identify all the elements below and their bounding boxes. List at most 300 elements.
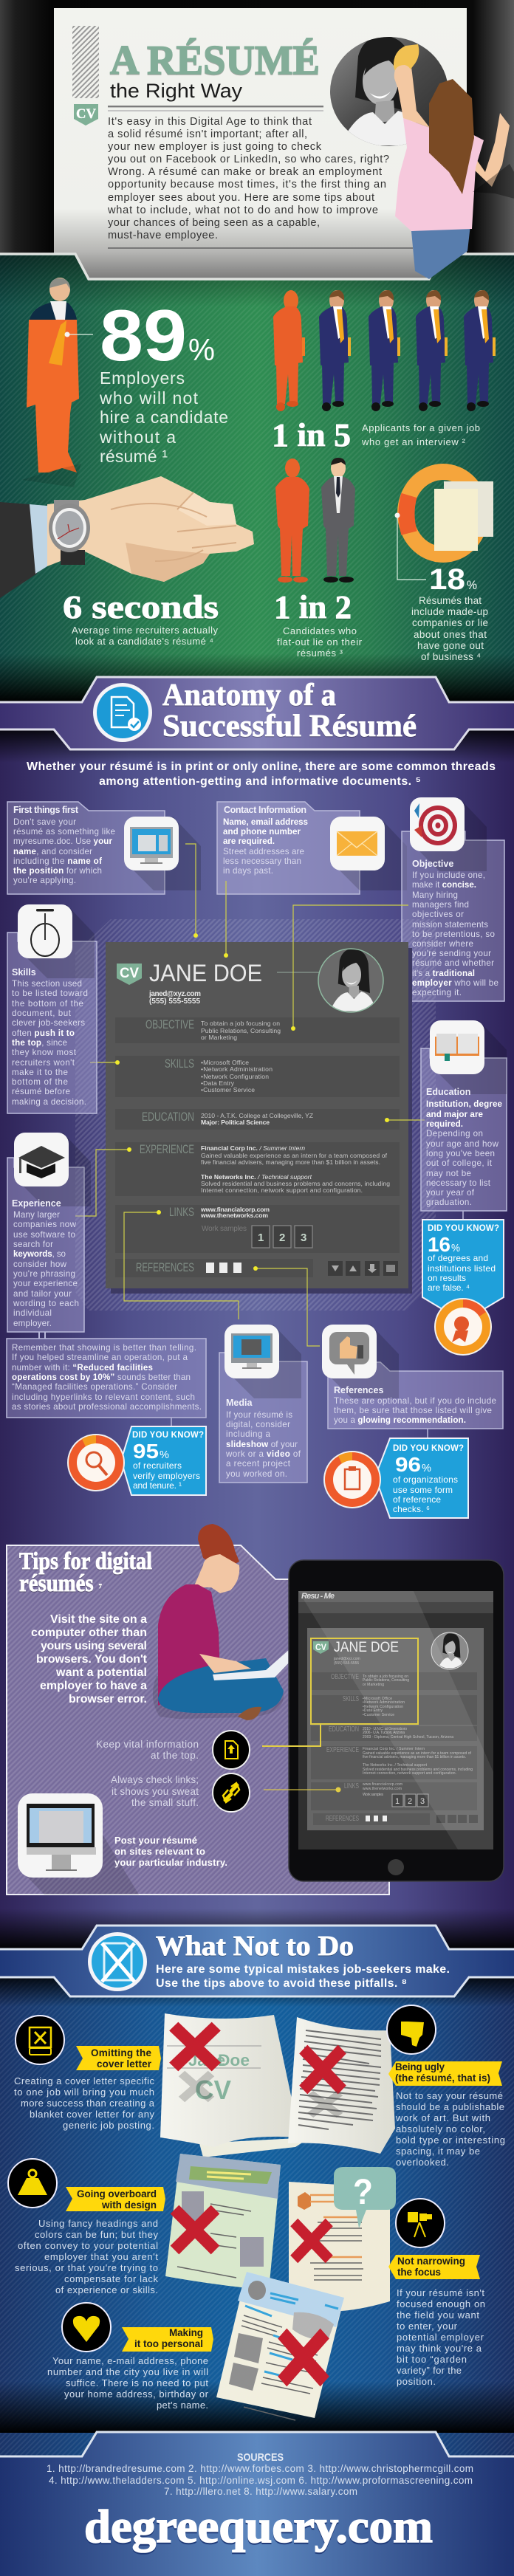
mini resume: EXPERIENCE <box>326 1746 359 1754</box>
heading: Anatomy of a <box>162 679 336 712</box>
panel: education <box>421 1020 507 1211</box>
heading: Media <box>226 1398 253 1408</box>
text block: you a glowing recommendation. <box>334 1415 466 1425</box>
paper: unfocused <box>289 2182 390 2311</box>
text block: number and the city you live in will <box>47 2366 208 2377</box>
text block: you're applying. <box>13 876 76 885</box>
text block: graduation. <box>426 1198 472 1207</box>
text block: Using fancy headings and <box>38 2218 158 2229</box>
text block <box>12 1343 202 1412</box>
text block: individual <box>13 1308 52 1318</box>
intro text: common threads: among attention-getting and informative documents. ⁵ <box>99 775 421 788</box>
icon: graduation cap card <box>14 1133 91 1206</box>
caption: include made-up <box>411 606 488 617</box>
text block: mission statements <box>412 920 488 930</box>
row: links: www.financialcorp.com <box>200 1206 270 1213</box>
ribbon label <box>122 2327 213 2352</box>
illustration: hand with wristwatch <box>0 476 254 598</box>
caption: have gone out <box>417 640 484 651</box>
heading: Contact Information <box>224 805 306 815</box>
text block: post on relevant sites: your particular industry. <box>114 1857 227 1868</box>
mini resume: OBJECTIVE <box>331 1673 359 1681</box>
number: 18%: 18 <box>429 563 465 596</box>
heading: Successful Résumé <box>162 710 417 743</box>
row: education: EDUCATION <box>142 1110 194 1124</box>
illustration: man in half-orange suit <box>22 278 81 487</box>
text block: operations cost by 10%” sounds better than <box>12 1373 191 1382</box>
callout: did you know 96 percent <box>323 1429 468 1518</box>
callout: did you know 16 percent <box>422 1211 504 1356</box>
row: links: 3 <box>301 1232 306 1244</box>
panel: first things first <box>7 802 201 894</box>
text block: Street addresses are <box>223 847 304 856</box>
stat: 1 in 2 candidates <box>274 458 363 659</box>
caption: who get an interview ² <box>361 436 466 447</box>
tablet home button <box>388 1859 404 1875</box>
intro text block: you out on Facebook or LinkedIn, so who cares, right? <box>108 154 389 165</box>
text block: serious, or that you're trying to <box>15 2262 158 2273</box>
caption: who will not <box>99 388 199 408</box>
buttons: resume controls <box>328 1261 398 1276</box>
ribbon label: Not narrowing <box>397 2256 465 2267</box>
row: education <box>115 1109 400 1130</box>
text block: test in browsers: employer to have a <box>40 1680 147 1692</box>
text block: the bottom of the <box>12 999 83 1009</box>
row: objective <box>115 1017 400 1043</box>
ribbon label: Being ugly <box>395 2061 445 2072</box>
text block: a recent project <box>226 1459 291 1469</box>
text block <box>412 870 498 997</box>
icon: chain link <box>213 1773 250 1812</box>
mini resume: or Marketing <box>363 1683 384 1687</box>
row: experience: Financial Corp Inc. / Summer Intern <box>201 1144 305 1152</box>
stat: 6 seconds <box>0 476 254 647</box>
row: objective: OBJECTIVE <box>145 1017 194 1031</box>
panel: sample resume <box>106 942 412 1294</box>
name: JANE DOE <box>149 960 262 986</box>
banner: what not to do <box>0 1925 514 1996</box>
intro text: common threads <box>27 760 496 788</box>
text block: make it concise. <box>412 880 476 890</box>
footer panel <box>0 2431 514 2576</box>
mini resume: •Customer Service <box>363 1713 394 1717</box>
text block: make it to the <box>12 1068 68 1077</box>
intro text block: what to include, what not to do and how to improve <box>107 205 378 216</box>
callout: did you know 16 percent: institutions listed <box>428 1263 496 1274</box>
text block: résumé and whether <box>412 958 494 968</box>
text block: absolutely no color, <box>396 2123 485 2134</box>
banner: anatomy of a successful resume <box>0 676 514 749</box>
row: experience <box>115 1142 400 1196</box>
mini resume: Work samples <box>363 1793 384 1797</box>
row: education: Major: Political Science <box>201 1119 270 1126</box>
mini resume: 3 <box>420 1797 425 1806</box>
text block: to be listed toward <box>12 989 88 998</box>
text block: them, be sure that those listed will give <box>334 1406 492 1415</box>
caption <box>99 368 228 466</box>
row: links: Work samples <box>202 1225 247 1233</box>
text block: overlooked. <box>396 2157 449 2168</box>
illustration: woman with laptop <box>153 1524 310 1720</box>
mistake: making it too personal <box>47 2303 213 2411</box>
ribbon label: it too personal <box>134 2338 203 2349</box>
callout: did you know 96 percent: of organizations <box>393 1474 458 1485</box>
decoration: striped tab <box>72 26 99 98</box>
intro text block: It's easy in this Digital Age to think that <box>108 116 312 128</box>
icon: desktop card <box>18 1793 139 1895</box>
mini resume: •Microsoft Office <box>363 1697 392 1701</box>
mini resume: SKILLS <box>343 1695 359 1703</box>
text block: of experience or skills. <box>55 2284 158 2295</box>
row: experience: EXPERIENCE <box>140 1142 194 1156</box>
text block: If you include one, <box>412 870 485 880</box>
panel: skills <box>7 904 97 1113</box>
illustration: woman wiping the mirror <box>394 44 514 279</box>
number: 18%: % <box>467 578 477 592</box>
text block <box>334 1396 496 1425</box>
tip: check links <box>111 1774 199 1808</box>
ribbon label <box>388 2255 480 2279</box>
connectors: yellow callout lines <box>75 844 425 1346</box>
text block: spacing, it may be <box>396 2146 480 2157</box>
tip: keep vital information: Keep vital information <box>96 1739 199 1750</box>
text block: This section used <box>12 979 82 989</box>
title: A RÉSUMÉ <box>110 38 320 83</box>
sources heading: SOURCES <box>237 2451 284 2464</box>
text block <box>223 817 308 876</box>
text block <box>47 2355 209 2411</box>
illustration: orange applicant <box>273 290 305 411</box>
illustration: stack of resume documents <box>160 2013 396 2420</box>
caption: Average time recruiters actually <box>72 625 219 636</box>
heading: Objective <box>412 859 453 869</box>
text block: use software to <box>13 1230 75 1240</box>
text block: position. <box>397 2376 436 2387</box>
ribbon label: the focus <box>397 2267 441 2278</box>
heading: Tips for digital <box>19 1548 152 1575</box>
text block: pet's name. <box>157 2400 208 2411</box>
row: skills: SKILLS <box>165 1057 194 1071</box>
panel: contact information <box>217 802 407 894</box>
mini resume: LINKS <box>344 1782 359 1790</box>
icon: weight <box>8 2159 57 2208</box>
text block: it's a traditional <box>412 969 475 978</box>
panel: references <box>322 1325 503 1429</box>
mini resume: 2010 - U.N.C. at Greensboro <box>363 1727 407 1731</box>
text block: test in browsers: browsers. You don't <box>36 1653 148 1666</box>
intro text block: your chances of being seen as a capable, <box>108 217 320 229</box>
row: objective: or Marketing <box>201 1034 237 1041</box>
text block <box>397 2287 485 2387</box>
text block: may think you're a <box>397 2343 482 2354</box>
background: green stats section <box>0 255 514 702</box>
text block: test in browsers <box>31 1613 148 1706</box>
callout: did you know 96 percent: DID YOU KNOW? <box>393 1444 464 1453</box>
text block: wording to each <box>13 1299 79 1308</box>
text block: required. <box>426 1119 463 1129</box>
text block: work of art. But with <box>395 2112 490 2123</box>
text block: expecting it. <box>412 988 462 997</box>
caption: without a <box>99 427 176 447</box>
text block: test in browsers: want a potential <box>55 1666 147 1679</box>
mini resume: janed@xyz.com <box>333 1657 360 1661</box>
paper: missing cover letter: Doe <box>218 2051 250 2070</box>
mini resume: Gained valuable experience as an intern for a team composed of <box>363 1751 472 1756</box>
text block: test in browsers: computer other than <box>31 1627 147 1639</box>
heading: résumés ⁷ <box>19 1570 102 1597</box>
row: objective: Public Relations, Consulting <box>201 1027 281 1034</box>
row: experience: Internet connection, network support and configuration. <box>201 1186 363 1194</box>
speech bubble with question mark: ? <box>353 2173 373 2212</box>
tip: check links: Always check links; <box>111 1774 199 1785</box>
row: experience: five financial advisers, managing more than $1 billion in assets. <box>201 1158 380 1166</box>
text block: to enter, your <box>397 2321 458 2332</box>
row: links: 2 <box>279 1232 285 1244</box>
caption: hire a candidate <box>100 408 228 427</box>
ribbon label <box>388 2061 502 2086</box>
row: links: www.thenetworks.com <box>200 1212 268 1219</box>
row: objective: To obtain a job focusing on <box>201 1020 280 1027</box>
number: 1 in 5: 1 in 5 <box>272 417 351 453</box>
text block: often convey to your potential <box>18 2240 158 2251</box>
icon: file upload <box>213 1731 250 1769</box>
row: skills: •Customer Service <box>201 1086 255 1093</box>
callout: did you know 16 percent: of degrees and <box>428 1253 488 1263</box>
callout: did you know 96 percent: 96 <box>395 1453 421 1476</box>
text block: the top, since <box>12 1038 67 1048</box>
intro text: common threads: Whether your résumé is in print or only online, there are some common threads <box>27 760 496 773</box>
contact details: (555) 555-5555 <box>149 997 200 1006</box>
text block: your experience <box>13 1279 78 1288</box>
caption: companies or lie <box>412 617 488 628</box>
icon: document with check <box>93 683 152 742</box>
caption <box>277 625 363 659</box>
icon: crossed document <box>88 1932 147 1991</box>
heading: Education <box>426 1087 470 1097</box>
text block: “Managed facilities operations.” Consider <box>12 1382 177 1392</box>
text block: out of college, it <box>426 1158 493 1168</box>
mini resume: EDUCATION <box>329 1725 359 1734</box>
heading <box>162 679 417 743</box>
text block: to be pretentious, so <box>412 930 495 939</box>
text block: Many hiring <box>412 890 458 900</box>
mini resume: 2003 - Diploma, Central High School, Tucson, Arizona <box>363 1735 453 1739</box>
subheading: Use the tips above to avoid these pitfalls. ⁸ <box>156 1977 407 1990</box>
caption: Candidates who <box>283 625 357 636</box>
text block: Creating a cover letter specific <box>14 2075 155 2086</box>
mini resume: www.thenetworks.com <box>363 1787 402 1791</box>
text block <box>13 1210 79 1328</box>
icon: magnifier badge <box>67 1434 125 1491</box>
text block: companies now <box>13 1220 77 1229</box>
text block: including a <box>226 1429 271 1439</box>
text block: and major are <box>426 1110 484 1119</box>
callout: did you know 16 percent: on results <box>428 1273 466 1283</box>
text block: you're phrasing <box>13 1269 75 1279</box>
subtitle: the Right Way <box>110 80 243 102</box>
row: skills: •Microsoft Office <box>201 1059 249 1066</box>
callout: did you know 95 percent: 95 <box>133 1440 159 1463</box>
callout: did you know 95 percent: % <box>160 1449 169 1461</box>
panel: media <box>219 1325 307 1483</box>
intro text block: a solid résumé isn't important; after all, <box>108 128 307 140</box>
text block: test in browsers: Visit the site on a <box>50 1613 147 1626</box>
site name: Resu - Me <box>301 1592 335 1601</box>
text block: colors can be fun; but they <box>35 2229 158 2240</box>
text block: consider where <box>412 939 473 949</box>
paper: missing cover letter <box>160 2013 310 2157</box>
illustration: tablet with resume <box>262 1560 504 1881</box>
text block: suffice. There is no need to put <box>66 2377 208 2388</box>
number: 6 seconds: 6 seconds <box>63 589 219 625</box>
callout: did you know 16 percent: % <box>451 1242 460 1254</box>
background: dark top section <box>0 0 514 255</box>
row: skills: •Network Configuration <box>201 1073 269 1080</box>
text block: test in browsers: browser error. <box>69 1693 147 1706</box>
text block: myresume.doc. Use your <box>13 837 112 846</box>
text block: clever job-seekers <box>12 1018 85 1028</box>
icon: unicycle card <box>18 904 95 978</box>
mistake: not narrowing the focus <box>388 2199 485 2387</box>
text block: are required. <box>223 837 275 846</box>
heading: Experience <box>12 1198 61 1209</box>
heading: What Not to Do <box>156 1931 354 1962</box>
callout: did you know 96 percent: use some form <box>393 1485 453 1495</box>
mistake: going overboard with design <box>8 2159 165 2295</box>
icon: ribbon badge <box>434 1298 492 1356</box>
caption: résumés ³ <box>297 648 343 659</box>
caption: Employers <box>100 368 185 388</box>
icon: video monitor card <box>225 1325 301 1398</box>
callout: did you know 95 percent: of recruiters <box>133 1460 182 1471</box>
mini resume <box>307 1628 484 1830</box>
intro text block: Wrong. A résumé can make or break an employment <box>108 166 382 178</box>
sources list: 1. http://brandredresume.com 2. http://www.forbes.com 3. http://www.christophermcgill.com <box>47 2463 473 2474</box>
text block: may not be <box>426 1169 471 1178</box>
sources list <box>47 2463 473 2497</box>
text block: blanket cover letter for any <box>30 2109 155 2120</box>
mini resume: 1 <box>395 1797 400 1806</box>
mini resume: •Data Entry <box>363 1708 383 1713</box>
mistake: being ugly <box>387 2005 505 2168</box>
icon: target card <box>410 797 487 871</box>
icon: thumbs up card <box>322 1325 399 1398</box>
heading: References <box>334 1385 383 1395</box>
text block: Not to say your résumé <box>396 2090 503 2101</box>
caption: résumé ¹ <box>100 447 168 466</box>
text block: including hyperlinks to relevant content, such <box>12 1392 195 1402</box>
icon: binoculars on tripod <box>396 2199 445 2247</box>
decoration: hatched backdrop behind resume <box>75 919 436 1311</box>
text block: making a decision. <box>12 1097 86 1107</box>
mini resume: five financial advisers, managing more than $1 billion in assets. <box>363 1755 466 1759</box>
text block: the field you want <box>397 2309 479 2321</box>
text block: post on relevant sites: on sites relevant to <box>114 1846 205 1857</box>
intro text block <box>107 116 389 241</box>
text block <box>15 2218 158 2295</box>
ribbon label: cover letter <box>97 2058 152 2070</box>
text block: should be a publishable <box>396 2101 504 2112</box>
text block: document, but <box>12 1009 72 1018</box>
chart: donut with documents <box>394 472 493 580</box>
text block: résumé before <box>12 1087 70 1096</box>
mini resume: Public Relations, Consulting <box>363 1678 409 1683</box>
intro text block: opportunity because most times, it's the first thing an <box>108 179 386 190</box>
illustration: portrait in mirror <box>330 35 448 146</box>
number: 89%: 89 <box>100 295 187 376</box>
icon: CV shield: CV <box>76 106 96 122</box>
row: references <box>115 1259 313 1277</box>
paper: ugly resume <box>288 2017 395 2154</box>
text block: recruiters won't <box>12 1058 75 1068</box>
mini resume: •Network Configuration <box>363 1705 403 1709</box>
tip: check links: it shows you sweat <box>112 1786 199 1797</box>
subheading: Here are some typical mistakes job-seekers make. <box>156 1963 450 1976</box>
text block: Institution, degree <box>426 1099 503 1109</box>
ribbon label <box>76 2046 161 2070</box>
paper: too personal <box>216 2272 344 2420</box>
text block: Depending on <box>426 1129 483 1138</box>
paper: missing cover letter: Jane <box>188 2051 225 2070</box>
text block: consider how <box>13 1260 67 1269</box>
text block: to one job will bring you much <box>14 2086 154 2098</box>
mini resume: •Network Administration <box>363 1700 405 1705</box>
caption: flat-out lie on their <box>277 636 363 648</box>
text block <box>12 979 88 1107</box>
stat: 18 percent fake companies <box>394 472 493 662</box>
mistake: omitting the cover letter <box>14 2016 161 2131</box>
text block: employer. <box>13 1319 52 1328</box>
text block: the position for which <box>13 866 102 876</box>
ribbon label: (the résumé, that is) <box>395 2072 490 2084</box>
intro text block: must-have employee. <box>108 230 218 241</box>
caption: look at a candidate's résumé ⁴ <box>75 636 213 647</box>
panel: showing is better than telling <box>7 1332 206 1418</box>
mini resume: (555) 555-5555 <box>334 1661 359 1666</box>
text block <box>225 1410 301 1479</box>
row: references: REFERENCES <box>136 1260 194 1274</box>
text block: long you've been <box>426 1149 495 1158</box>
callout: did you know 96 percent: % <box>422 1462 431 1474</box>
number: 18% <box>429 563 477 596</box>
text block: variety” for the <box>397 2365 462 2376</box>
text block: they know most <box>12 1048 77 1057</box>
text block: including the name of <box>13 856 102 866</box>
text block: as stories about professional accomplishments. <box>12 1402 202 1412</box>
icon: envelope card <box>330 817 407 890</box>
paper: overdesigned <box>165 2154 281 2290</box>
icon: thumbs down <box>387 2005 436 2054</box>
text block: compensate for lack <box>64 2273 158 2284</box>
text block: bold type or interesting <box>396 2134 505 2146</box>
caption: about ones that <box>414 629 487 640</box>
callout: did you know 96 percent: checks. ⁶ <box>393 1504 430 1514</box>
ribbon label: with design <box>101 2199 157 2211</box>
mini resume: To obtain a job focusing on <box>363 1675 408 1679</box>
text block: managers find <box>412 900 469 910</box>
callout: did you know 16 percent: 16 <box>428 1233 450 1256</box>
text block: employer who will be <box>412 978 498 988</box>
row: skills: •Data Entry <box>201 1079 235 1087</box>
caption: Résumés that <box>419 595 482 606</box>
icon: open book card <box>430 1020 507 1094</box>
text block: work or a video of <box>225 1449 301 1459</box>
row: links: 1 <box>258 1232 264 1244</box>
text block: search for <box>13 1240 53 1249</box>
callout: did you know 16 percent: DID YOU KNOW? <box>428 1224 499 1233</box>
row: links: LINKS <box>169 1205 194 1219</box>
logo: degreequery.com: degreequery.com <box>84 2500 433 2552</box>
